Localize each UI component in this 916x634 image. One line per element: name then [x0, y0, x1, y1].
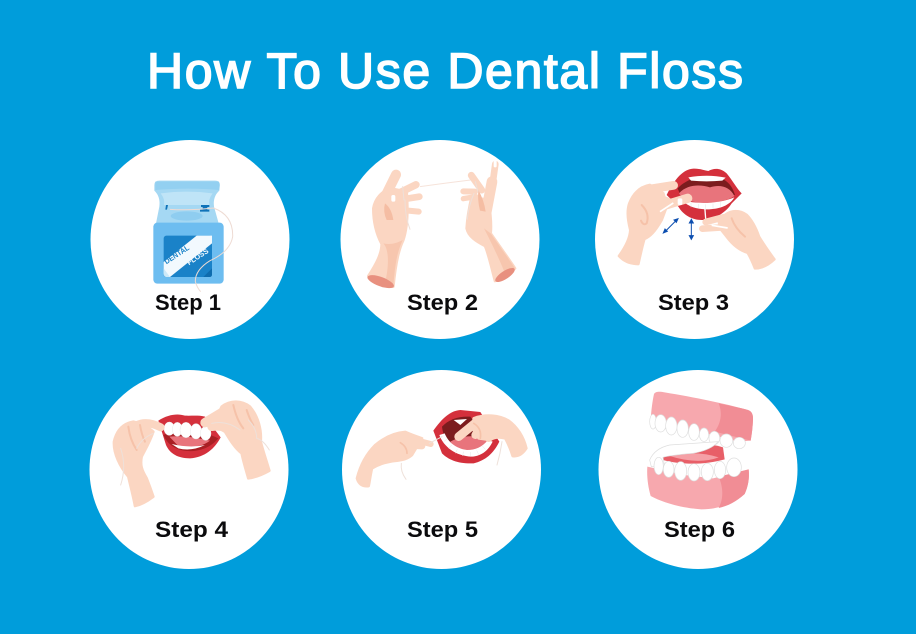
lower gum: [647, 467, 749, 509]
mouth: [433, 410, 499, 463]
right hand: [718, 211, 774, 268]
left hand: [619, 185, 667, 264]
label: step 2: Step 2: [407, 290, 478, 315]
label: step 3: Step 3: [658, 290, 729, 315]
label: DENTAL: DENTAL: [163, 243, 191, 266]
icon: flossing front teeth: [619, 169, 774, 268]
panel: step 3: [595, 140, 794, 339]
icon: hands holding floss: [366, 160, 517, 291]
icon: flossing lower teeth: [357, 410, 526, 486]
label: FLOSS: FLOSS: [185, 246, 210, 267]
right hand: [467, 197, 515, 281]
icon: floss between teeth: [114, 402, 269, 506]
left hand: [357, 432, 422, 486]
left hand: [114, 422, 153, 506]
panel: step 4: [90, 370, 288, 569]
arrow: vertical: [689, 219, 693, 239]
mouth: [158, 414, 221, 458]
upper gum: [651, 392, 753, 442]
icon: dentures: [647, 392, 753, 509]
icon: floss box: [153, 181, 233, 292]
lower teeth: [650, 442, 741, 481]
right hand: [213, 402, 269, 478]
mouth: [667, 169, 742, 220]
panel: step 1: [90, 140, 290, 339]
right hand: [474, 416, 526, 456]
title: How To Use Dental Floss: [147, 43, 743, 99]
teeth: [164, 422, 211, 440]
label: step 5: Step 5: [407, 517, 478, 542]
upper teeth: [650, 414, 745, 449]
arrow: diagonal: [663, 219, 678, 233]
panel: step 2: [340, 140, 540, 339]
label: step 1: Step 1: [155, 290, 221, 315]
inner mouth: [661, 444, 725, 464]
label: step 6: Step 6: [664, 517, 735, 542]
panel: step 6: [598, 370, 798, 569]
left hand: [368, 188, 407, 287]
label: step 4: Step 4: [155, 517, 229, 542]
panel: step 5: [342, 370, 541, 569]
